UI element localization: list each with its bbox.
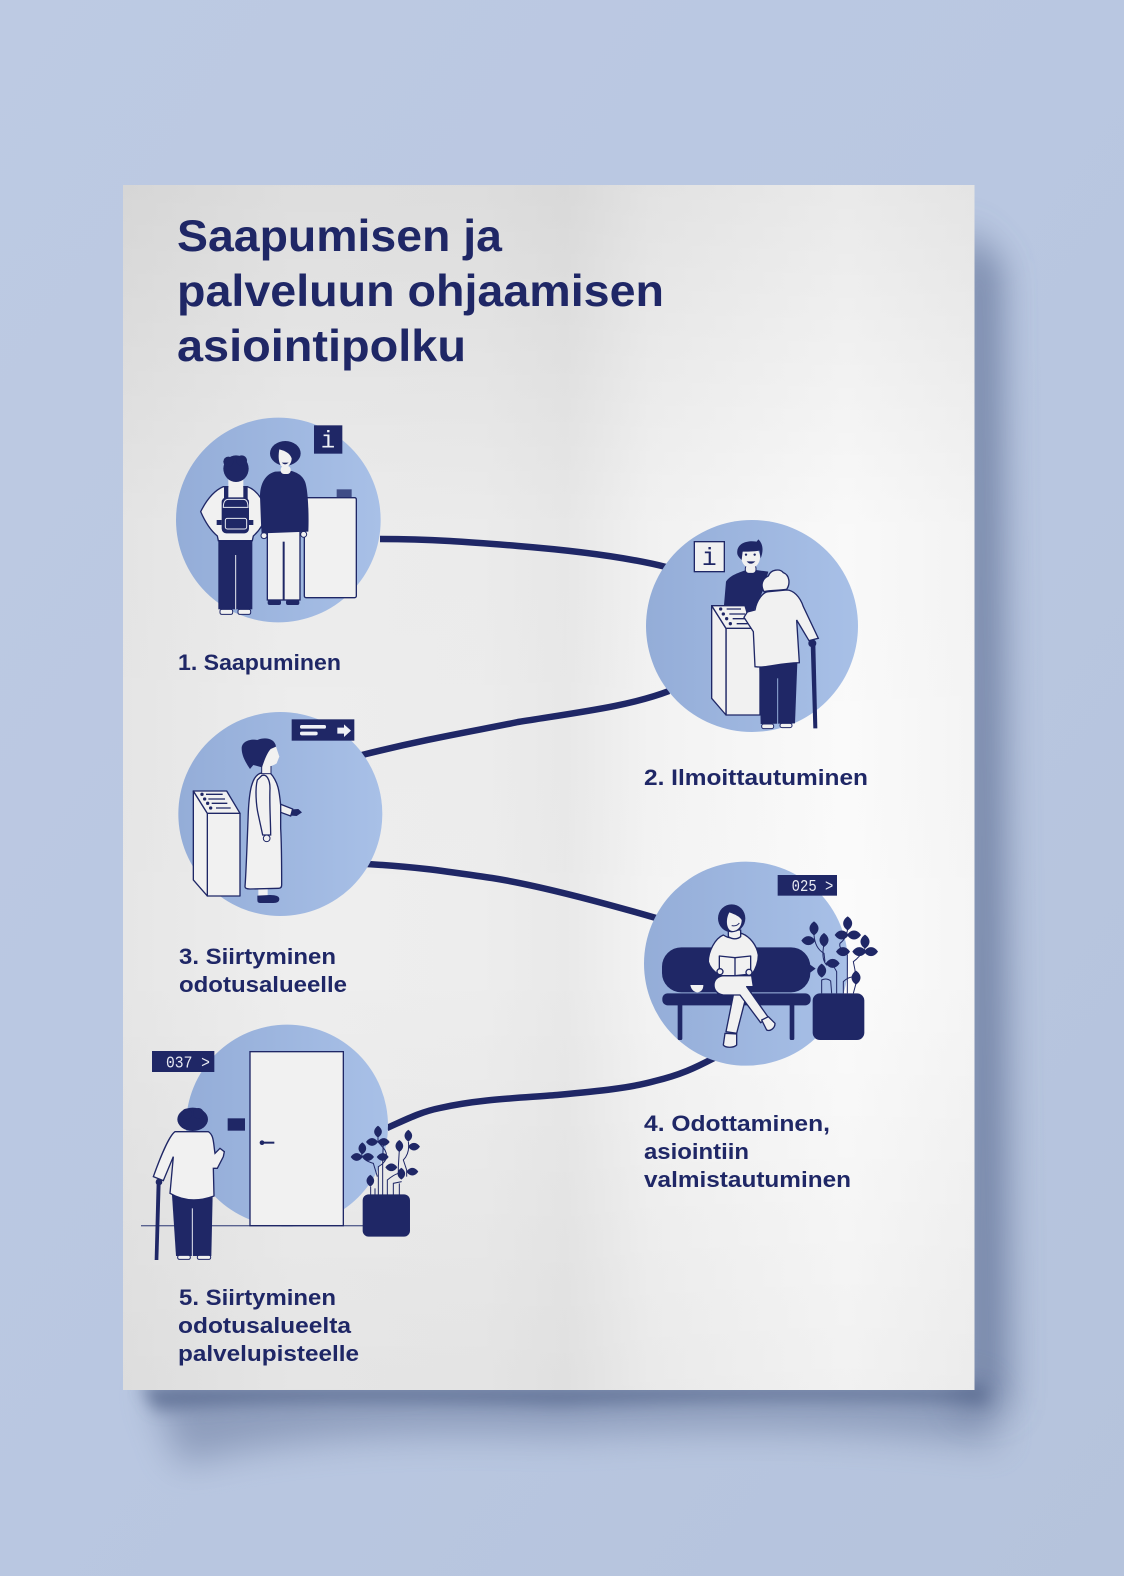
info sign — [694, 542, 724, 573]
label 4: 4. Odottaminen, — [644, 1111, 830, 1136]
reception desk — [304, 489, 356, 598]
label 2: 2. Ilmoittautuminen — [644, 765, 868, 790]
info sign: i — [321, 428, 335, 455]
kiosk — [193, 791, 240, 896]
illustration 1: arrival — [176, 418, 381, 622]
illustration 4: waiting — [644, 862, 878, 1066]
paper sheet — [123, 185, 974, 1390]
queue number display: 025 > — [792, 878, 833, 897]
visitor with backpack — [201, 455, 268, 614]
label 3 — [179, 944, 347, 997]
door plate — [228, 1118, 245, 1131]
label 4 — [644, 1111, 851, 1192]
title: asiointipolku — [177, 322, 466, 371]
label 5: odotusalueelta — [178, 1313, 352, 1338]
circle — [646, 520, 858, 732]
queue number display — [778, 875, 837, 897]
title: palveluun ohjaamisen — [177, 267, 664, 316]
title: Saapumisen ja — [177, 212, 503, 261]
illustration 3: moving to waiting area — [178, 712, 382, 916]
info sign: i — [702, 545, 717, 573]
door — [250, 1052, 343, 1226]
label 4: valmistautuminen — [644, 1167, 851, 1192]
staff member — [724, 539, 768, 615]
label 5: palvelupisteelle — [178, 1341, 359, 1366]
label 1: 1. Saapuminen — [178, 650, 341, 675]
floor line — [141, 1224, 367, 1228]
illustration 5: moving to service point — [141, 1025, 420, 1260]
queue number display — [152, 1051, 214, 1073]
woman in long coat — [242, 738, 302, 903]
direction sign — [292, 719, 354, 741]
label 3: odotusalueelle — [179, 972, 347, 997]
circle — [186, 1025, 388, 1227]
journey path connectors — [362, 539, 714, 1128]
circle — [178, 712, 382, 916]
check-in kiosk — [712, 606, 760, 715]
paper shadow — [140, 225, 1008, 1465]
elderly visitor with cane — [744, 570, 818, 729]
label 4: asiointiin — [644, 1139, 749, 1164]
elderly visitor with cane — [153, 1108, 224, 1260]
info sign — [314, 425, 342, 455]
label 3: 3. Siirtyminen — [179, 944, 336, 969]
illustration 2: registration — [646, 520, 858, 732]
woman reading a book — [708, 904, 775, 1047]
potted plant — [351, 1126, 420, 1237]
title — [177, 212, 664, 371]
queue number display: 037 > — [166, 1054, 210, 1073]
label 5: 5. Siirtyminen — [179, 1285, 336, 1310]
coffee cup — [690, 985, 703, 992]
receptionist — [260, 441, 309, 605]
potted plant — [801, 916, 878, 1040]
circle — [176, 418, 381, 622]
circle — [644, 862, 848, 1066]
label 5 — [178, 1285, 359, 1366]
bench — [662, 947, 816, 1040]
